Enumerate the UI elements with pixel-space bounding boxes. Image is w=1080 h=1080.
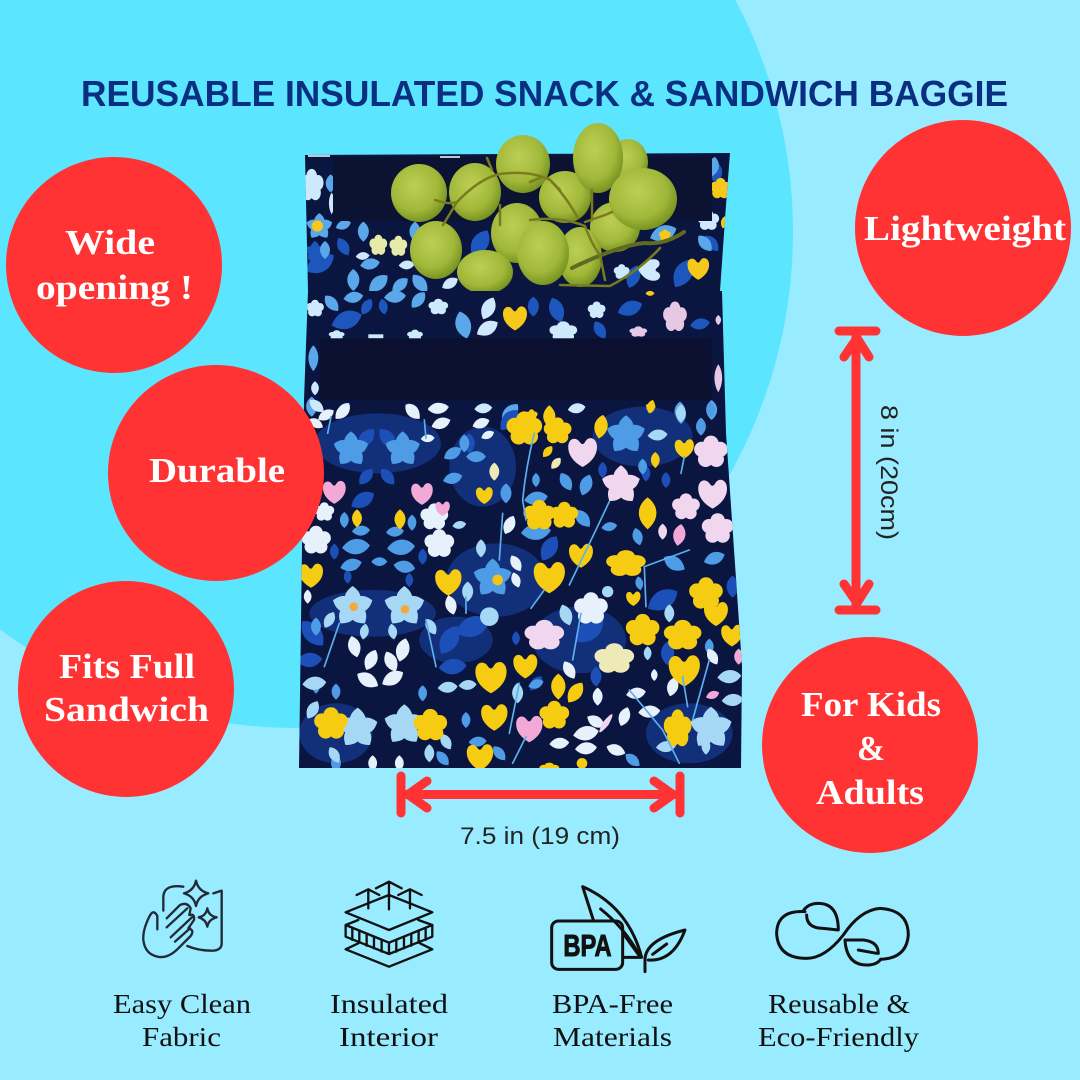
icon: hand wiping clean xyxy=(143,881,222,957)
height label: 8 in (20cm) xyxy=(875,405,902,540)
label: reusable and eco-friendly: Eco-Friendly xyxy=(758,1022,920,1052)
bag front panel xyxy=(295,288,747,774)
height dimension arrow xyxy=(839,331,876,610)
upper band pattern xyxy=(306,289,722,427)
icon: insulated layers xyxy=(346,882,432,967)
feature bubble: lightweight xyxy=(855,120,1071,336)
grape stems xyxy=(435,158,684,286)
grapes xyxy=(391,123,684,294)
label: easy clean fabric xyxy=(113,989,252,1052)
icon: infinity loop with leaves xyxy=(777,903,908,965)
product photo: floral bag with grapes xyxy=(295,123,747,774)
feature bubble: fits full sandwich: Sandwich xyxy=(44,690,209,729)
feature bubble: wide opening xyxy=(6,157,222,373)
feature bubble: wide opening: opening ! xyxy=(36,268,193,307)
label: BPA-free materials xyxy=(552,989,673,1052)
label: insulated interior xyxy=(330,989,449,1052)
feature bubble: for kids and adults: & xyxy=(857,729,885,768)
top velcro strip xyxy=(333,157,712,221)
feature bubble: durable xyxy=(108,365,324,581)
title: REUSABLE INSULATED SNACK & SANDWICH BAGGIE xyxy=(81,73,1008,114)
label: reusable and eco-friendly: Reusable & xyxy=(768,989,910,1019)
label: easy clean fabric: Fabric xyxy=(142,1022,221,1052)
label: insulated interior: Insulated xyxy=(330,989,449,1019)
lower velcro strip xyxy=(320,338,712,400)
bag back flap xyxy=(300,150,735,296)
feature bubble: lightweight: Lightweight xyxy=(864,209,1066,248)
width dimension arrow xyxy=(401,776,680,813)
label: BPA-free materials: BPA-Free xyxy=(552,989,673,1019)
feature bubble: fits full sandwich: Fits Full xyxy=(59,647,195,686)
width label: 7.5 in (19 cm) xyxy=(460,823,620,850)
blue haze behind flowers xyxy=(299,407,733,763)
feature bubble: durable: Durable xyxy=(149,451,285,490)
lower floral pattern xyxy=(296,399,744,774)
feature bubble: for kids and adults xyxy=(762,637,978,853)
label: easy clean fabric: Easy Clean xyxy=(113,989,252,1019)
icon: BPA-free badge with leaves xyxy=(552,887,685,972)
label: reusable and eco-friendly xyxy=(758,989,920,1052)
icon: BPA-free badge with leaves: BPA xyxy=(563,929,612,963)
feature bubble: fits full sandwich xyxy=(18,581,234,797)
label: insulated interior: Interior xyxy=(339,1022,438,1052)
feature bubble: for kids and adults: Adults xyxy=(816,773,924,812)
feature bubble: wide opening: Wide xyxy=(65,223,155,262)
label: BPA-free materials: Materials xyxy=(553,1022,672,1052)
feature bubble: for kids and adults: For Kids xyxy=(801,685,941,724)
